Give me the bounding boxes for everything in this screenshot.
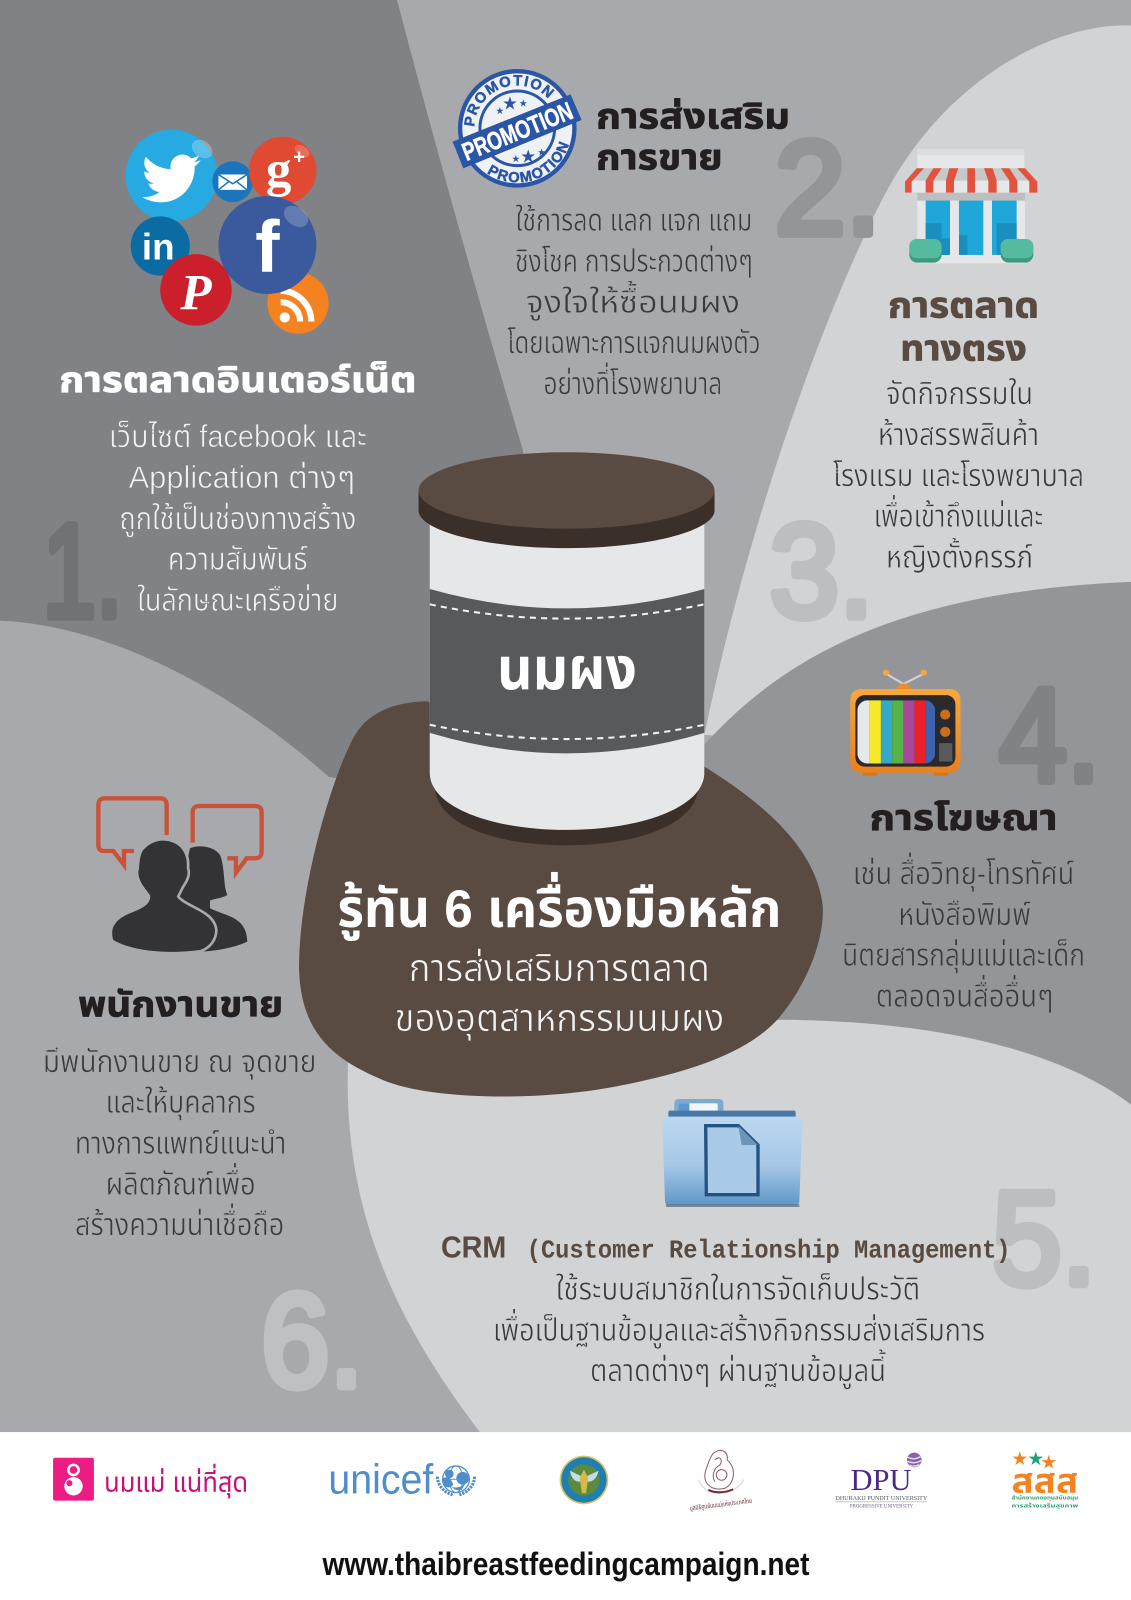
icon: folder xyxy=(662,1099,802,1207)
text block: เช่น สื่อวิทยุ-โทรทัศน์ xyxy=(853,852,1074,892)
text block xyxy=(493,1270,985,1390)
text block: ห้างสรรพสินค้า xyxy=(878,416,1039,452)
icon: people with speech bubbles xyxy=(98,798,262,952)
heading xyxy=(888,285,1039,368)
icon: social media bubbles: f xyxy=(255,205,280,288)
text block: ชิงโชค การประกวดต่างๆ xyxy=(515,243,753,279)
text block: จูงใจให้ซื้อนมผง xyxy=(526,280,740,321)
heading xyxy=(596,97,790,177)
milk powder can xyxy=(419,452,715,845)
heading: (Customer Relationship Management) xyxy=(527,1237,1011,1266)
text block: อย่างที่โรงพยาบาล xyxy=(544,362,722,401)
text block: ถูกใช้เป็นช่องทางสร้าง xyxy=(119,500,356,538)
heading: พนักงานขาย xyxy=(78,985,283,1025)
subtitle: ของอุตสาหกรรมนมผง xyxy=(395,997,724,1041)
logo: ThaiHealth: ★ xyxy=(1012,1451,1028,1468)
heading: CRM xyxy=(441,1231,506,1265)
text block: นิตยสารกลุ่มแม่และเด็ก xyxy=(842,937,1085,974)
icon: social media bubbles: P xyxy=(179,265,212,321)
icon: promotion stamp: PROMOTION xyxy=(458,97,577,167)
logo: ThaiHealth xyxy=(1012,1451,1079,1510)
text block: โรงแรม และโรงพยาบาล xyxy=(833,457,1084,493)
text block: หญิงตั้งครรภ์ xyxy=(886,537,1033,575)
logo: ThaiHealth: การสร้างเสริมสุขภาพ xyxy=(1012,1503,1078,1510)
logo: DPU: DPU xyxy=(851,1463,912,1497)
text block: และให้บุคลากร xyxy=(106,1084,256,1121)
brown blob xyxy=(299,701,823,1097)
logo: DPU: DHURAKIJ PUNDIT UNIVERSITY xyxy=(836,1496,928,1502)
icon: promotion stamp: PROMOTION xyxy=(487,141,569,183)
footer xyxy=(0,1432,1131,1600)
icon: promotion stamp: ★ xyxy=(512,154,520,163)
number 3: 3. xyxy=(770,498,874,646)
text block: โดยเฉพาะการแจกนมผงตัว xyxy=(507,324,760,360)
text block: ตลอดจนสื่ออื่นๆ xyxy=(876,975,1053,1014)
icon: promotion stamp: ★ xyxy=(503,96,518,112)
text block: ใช้การลด แลก แจก แถม xyxy=(515,202,752,238)
heading: การส่งเสริม xyxy=(596,97,790,137)
text block: เพื่อเข้าถึงแม่และ xyxy=(874,495,1043,534)
text block: เว็บไซต์ facebook และ xyxy=(109,418,367,454)
heading: ทางตรง xyxy=(900,328,1027,368)
icon: social media bubbles: g xyxy=(266,142,292,198)
can label: นมผง xyxy=(497,635,637,702)
heading: การตลาดอินเตอร์เน็ต xyxy=(59,360,416,400)
icon: promotion stamp xyxy=(452,69,582,188)
text block: Application ต่างๆ xyxy=(129,459,355,495)
number 5: 5. xyxy=(992,1165,1096,1313)
panel: salespeople xyxy=(43,798,316,1242)
title: รู้ทัน 6 เครื่องมือหลัก xyxy=(337,871,781,941)
text block: ในลักษณะเครือข่าย xyxy=(137,581,338,617)
heading: การขาย xyxy=(596,137,723,177)
panel: central brown blob with title xyxy=(299,701,823,1097)
panel: advertising xyxy=(842,670,1085,1014)
text block xyxy=(842,852,1085,1014)
number 2: 2. xyxy=(775,115,881,263)
icon: promotion stamp: ★ xyxy=(538,148,546,157)
icon: promotion stamp: ★ xyxy=(519,99,527,108)
icon: social media bubbles: + xyxy=(293,146,305,168)
logo: ThaiHealth: สำนักงานกองทุนสนับสนุน xyxy=(1012,1495,1079,1502)
text block: ทางการแพทย์แนะนำ xyxy=(75,1125,286,1161)
panel: direct marketing xyxy=(833,149,1084,575)
icon: social media bubbles xyxy=(126,130,329,334)
logo: ministry seal xyxy=(560,1456,608,1504)
heading: การโฆษณา xyxy=(870,798,1058,838)
text block xyxy=(507,202,760,401)
subtitle: การส่งเสริมการตลาด xyxy=(409,947,710,990)
text block: ใช้ระบบสมาชิกในการจัดเก็บประวัติ xyxy=(556,1270,920,1306)
text block xyxy=(43,1043,316,1242)
icon: store xyxy=(905,149,1037,263)
icon: promotion stamp: ★ xyxy=(521,150,536,166)
text block: ตลาดต่างๆ ผ่านฐานข้อมูลนี้ xyxy=(590,1349,886,1390)
logo: ThaiHealth: สสส xyxy=(1012,1464,1078,1501)
text block: หนังสือพิมพ์ xyxy=(898,896,1031,932)
text block: ผลิตภัณฑ์เพื่อ xyxy=(106,1162,256,1201)
text block xyxy=(109,418,367,617)
logo: unicef: unicef xyxy=(328,1455,434,1502)
logo: ThaiHealth: ★ xyxy=(1028,1451,1044,1468)
text block: จัดกิจกรรมใน xyxy=(886,375,1033,411)
text block xyxy=(833,375,1084,575)
icon: television xyxy=(850,670,961,776)
logo: mother and child foundation xyxy=(689,1451,752,1512)
text block: มีพนักงานขาย ณ จุดขาย xyxy=(43,1043,316,1080)
number 6: 6. xyxy=(261,1267,363,1415)
logo: breastfeeding campaign xyxy=(53,1458,248,1501)
icon: social media bubbles: in xyxy=(142,226,175,267)
panel: sales promotion xyxy=(452,69,790,401)
heading xyxy=(441,1231,1011,1266)
logo: mother and child foundation: มูลนิธิศูนย์นมแม่แห่งประเทศไทย xyxy=(689,1496,752,1512)
logo: DPU xyxy=(836,1453,928,1509)
panel: internet marketing xyxy=(59,130,416,617)
icon: promotion stamp: ★ xyxy=(496,106,504,115)
icon: promotion stamp: PROMOTION xyxy=(464,74,555,126)
text block: สร้างความน่าเชื่อถือ xyxy=(75,1203,284,1242)
logo: DPU: PROGRESSIVE UNIVERSITY xyxy=(850,1504,914,1509)
logo: ThaiHealth: ★ xyxy=(1041,1454,1057,1471)
heading: การตลาด xyxy=(888,285,1039,325)
number 4: 4. xyxy=(999,662,1100,810)
number 1: 1. xyxy=(43,498,122,646)
text block: ความสัมพันธ์ xyxy=(168,541,308,577)
website url: www.thaibreastfeedingcampaign.net xyxy=(322,1545,810,1582)
subtitle xyxy=(395,947,724,1041)
logo: breastfeeding campaign: นมแม่ แน่ที่สุด xyxy=(104,1463,248,1498)
text block: เพื่อเป็นฐานข้อมูลและสร้างกิจกรรมส่งเสริมการ xyxy=(493,1308,985,1349)
panel: CRM xyxy=(441,1099,1011,1390)
